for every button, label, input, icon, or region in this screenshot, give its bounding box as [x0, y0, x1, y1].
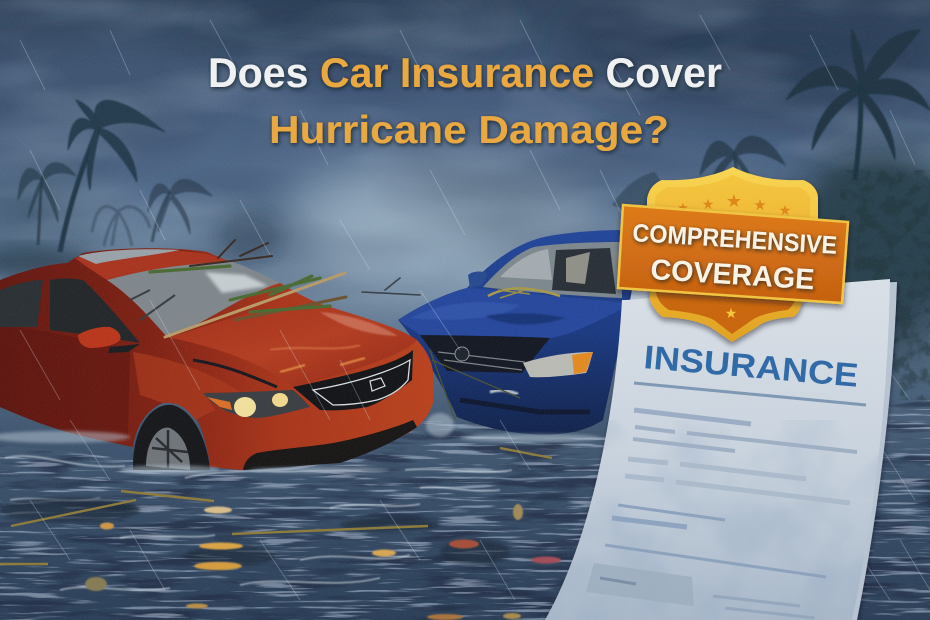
shield stars: ★	[725, 305, 737, 321]
orange banner	[618, 205, 848, 303]
shield stars: ★	[677, 200, 689, 215]
title	[208, 49, 722, 152]
shield stars	[677, 191, 791, 321]
red car headlight	[203, 390, 310, 418]
red car body	[0, 248, 433, 470]
branches on red car	[150, 240, 420, 337]
red car roof highlight	[75, 251, 233, 280]
insurance document	[545, 279, 897, 620]
title line 1: Does Car Insurance Cover	[208, 49, 722, 96]
paper heading: INSURANCE	[642, 338, 860, 394]
blue car mirror	[468, 272, 488, 288]
banner text	[632, 219, 838, 296]
palm trees and foliage right	[612, 30, 930, 307]
coverage badge	[618, 167, 848, 342]
shield stars: ★	[779, 202, 791, 218]
red car grille	[293, 350, 413, 410]
red car door shading	[0, 326, 130, 440]
red car mirror	[78, 327, 121, 348]
banner text: COMPREHENSIVE	[632, 219, 838, 260]
paper sheet	[545, 279, 890, 620]
blue car headlight	[523, 352, 593, 377]
shield stars: ★	[726, 191, 742, 211]
shield stars: ★	[702, 196, 714, 212]
red car windshield	[107, 262, 280, 337]
shield	[647, 167, 818, 342]
flood water	[0, 400, 930, 620]
red car wheel	[133, 405, 210, 470]
banner text: COVERAGE	[650, 254, 815, 296]
paper text lines	[605, 383, 866, 618]
red car lower grille	[243, 420, 417, 470]
red car	[0, 240, 600, 475]
palm trees left	[0, 100, 282, 278]
shield stars: ★	[753, 197, 767, 214]
blue car windshield	[483, 242, 622, 298]
red car side windows	[0, 280, 43, 327]
red car hood	[167, 307, 417, 387]
title line 2: Hurricane Damage?	[269, 109, 669, 152]
blue car	[398, 230, 632, 435]
red car front panel	[133, 352, 240, 420]
blue car grille	[420, 335, 550, 373]
floating debris	[0, 448, 561, 620]
spray at waterline	[0, 413, 600, 475]
blue car hood	[398, 288, 622, 338]
